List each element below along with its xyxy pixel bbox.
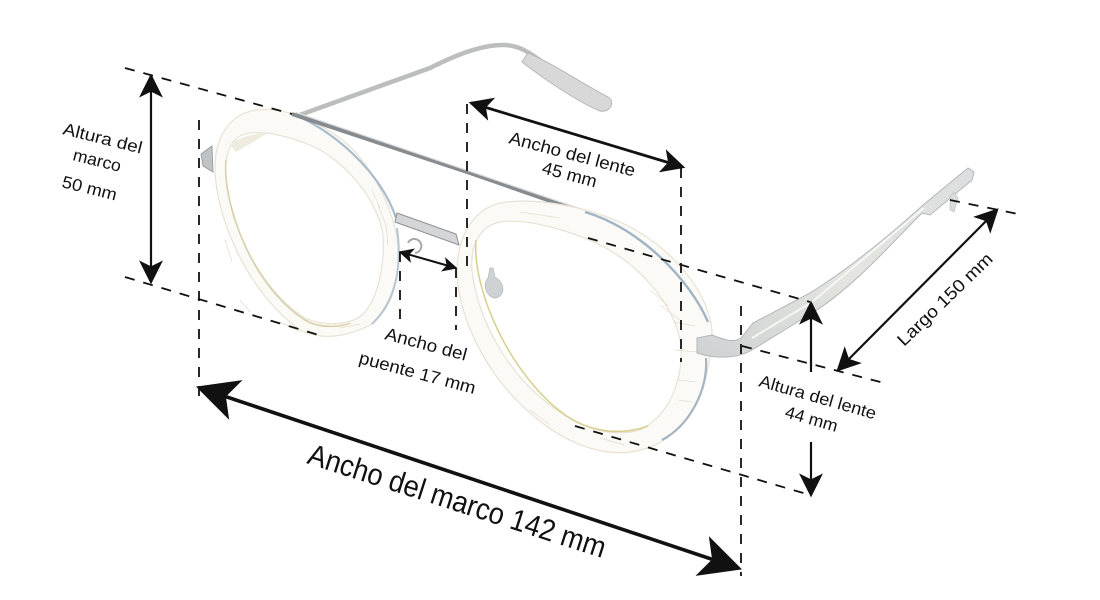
- glasses: left lens frame: [201, 110, 399, 336]
- label: frame height: marco: [71, 145, 123, 176]
- label: frame width: Ancho del marco 142 mm: [304, 438, 610, 565]
- glasses: right lens frame: [457, 201, 712, 453]
- label: lens width: Ancho del lente: [507, 128, 638, 181]
- glasses: top bar and bridge: [292, 112, 585, 253]
- arrow: temple length: [838, 210, 997, 370]
- label: lens height: 44 mm: [783, 403, 840, 436]
- near temple arm: [697, 168, 974, 357]
- arrow: frame width: [200, 388, 738, 568]
- arrow: frame height: [150, 76, 152, 282]
- arrow: lens height upper: [810, 303, 812, 372]
- label: temple length: Largo 150 mm: [893, 249, 997, 350]
- arrow: bridge width: [400, 252, 456, 268]
- label: frame height: [60, 119, 144, 204]
- dashed guide lines: [125, 68, 1018, 576]
- label: lens width: 45 mm: [540, 158, 599, 191]
- arrow: lens height lower: [810, 442, 812, 495]
- arrow: lens width: [471, 103, 683, 167]
- label: bridge width: puente 17 mm: [357, 348, 478, 398]
- label: bridge width: Ancho del: [383, 324, 469, 365]
- label: lens height: Altura del lente: [757, 372, 878, 423]
- label: frame height: 50 mm: [60, 172, 119, 204]
- label: frame height: Altura del: [61, 119, 144, 157]
- label: bridge width: [357, 324, 478, 398]
- far temple arm: [297, 45, 612, 116]
